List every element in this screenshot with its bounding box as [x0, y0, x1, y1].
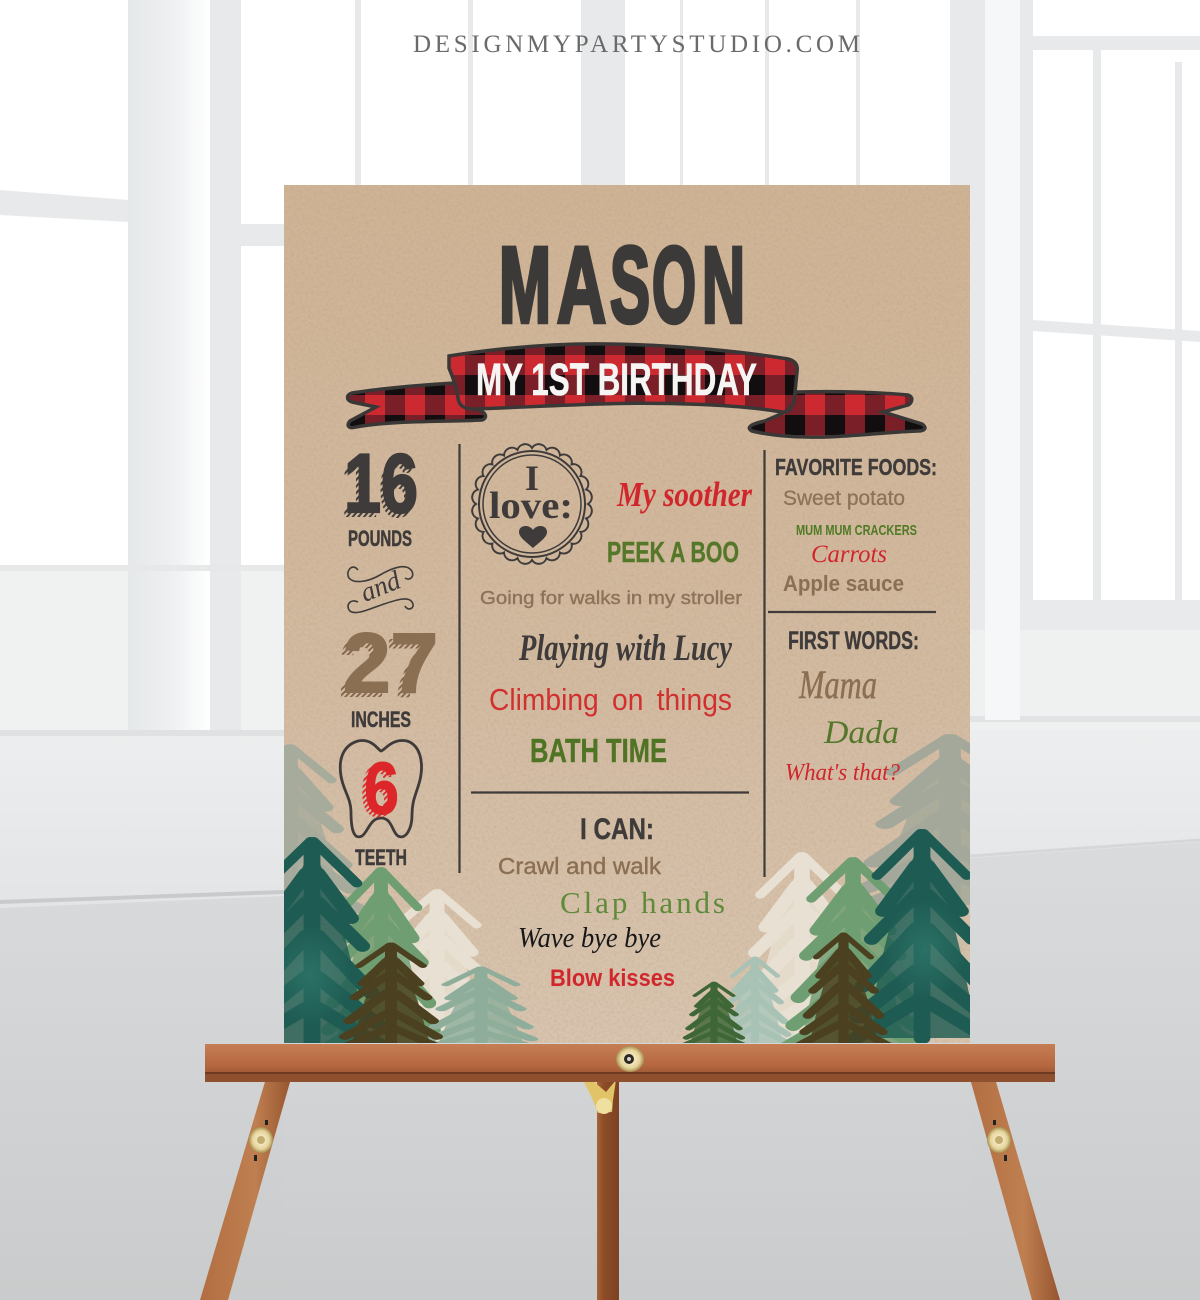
gray tree right	[861, 734, 970, 912]
love item 6: BATH TIME	[530, 732, 667, 769]
ledge top bar	[205, 1044, 1055, 1073]
badge word love: love:	[489, 485, 573, 527]
food item 1: Sweet potato	[783, 487, 905, 510]
I love badge	[472, 444, 592, 564]
can item 4: Blow kisses	[550, 965, 675, 992]
love item 2: PEEK A BOO	[607, 537, 739, 569]
can item 1: Crawl and walk	[498, 853, 662, 879]
easel left leg	[200, 1075, 292, 1300]
easel centre post	[597, 1080, 619, 1300]
title name: S	[610, 224, 650, 345]
white tree left	[403, 889, 492, 1042]
green tree right	[785, 861, 921, 1048]
badge heart	[519, 526, 547, 548]
tooth outline	[340, 741, 421, 837]
sage tree left	[424, 968, 538, 1049]
first words section	[785, 627, 919, 786]
and flourish	[348, 564, 413, 613]
left wing nut	[249, 1120, 273, 1161]
height number: 27	[338, 621, 433, 715]
can item 3: Wave bye bye	[518, 923, 661, 954]
brass clip	[583, 1080, 616, 1114]
love item 3: Going for walks in my stroller	[480, 588, 742, 608]
badge word I: I	[525, 458, 539, 498]
I love list	[480, 475, 752, 769]
ribbon left tail	[348, 383, 485, 428]
weight number: 16	[340, 441, 416, 535]
header: studio name: DESIGNMYPARTYSTUDIO.COM	[413, 31, 860, 58]
ribbon right tail	[749, 392, 925, 437]
ledge knob	[616, 1046, 644, 1072]
word 1: Mama	[798, 662, 877, 707]
word 2: Dada	[823, 715, 899, 751]
title name: O	[652, 224, 696, 345]
food item 4: Apple sauce	[783, 571, 904, 596]
gray tree left	[284, 744, 364, 913]
column dividers	[460, 444, 936, 877]
ledge lip	[205, 1072, 1055, 1082]
I can section	[498, 813, 725, 992]
stats column	[338, 436, 438, 870]
easel right leg	[969, 1075, 1060, 1300]
brown tree right	[799, 935, 888, 1045]
pounds label: POUNDS	[348, 526, 412, 551]
ribbon main band	[449, 344, 797, 412]
easel ledge	[205, 1044, 1055, 1082]
right wing nut	[987, 1120, 1011, 1161]
title name	[499, 224, 745, 345]
I can heading: I CAN:	[580, 813, 654, 846]
pine trees left	[284, 744, 538, 1043]
and flourish: and	[356, 564, 405, 608]
favorite foods section	[775, 454, 937, 596]
love item 5: Climbing on things	[489, 682, 732, 717]
word 3: What's that?	[785, 760, 900, 786]
weight number: 16	[344, 436, 418, 530]
small dark green tree	[683, 983, 745, 1045]
ribbon text: MY 1ST BIRTHDAY	[476, 354, 757, 405]
teeth number: 6	[364, 747, 399, 830]
easel legs	[200, 1075, 1060, 1300]
food item 2: MUM MUM CRACKERS	[796, 522, 917, 539]
love item 4: Playing with Lucy	[518, 628, 732, 669]
teal tree left	[284, 837, 385, 1043]
title name: M	[499, 224, 551, 345]
poster	[284, 185, 970, 1043]
teal tree right	[848, 829, 970, 1043]
white tree right	[740, 852, 842, 1040]
teeth number: 6	[360, 750, 395, 833]
food item 3: Carrots	[811, 541, 887, 568]
words heading: FIRST WORDS:	[788, 627, 919, 655]
height number: 27	[343, 616, 438, 710]
title name: N	[702, 224, 745, 345]
pine trees right	[682, 734, 970, 1043]
love item 1: My soother	[616, 475, 752, 514]
green tree left	[321, 871, 441, 1052]
ribbon banner	[348, 344, 925, 437]
pale blue tree right	[719, 958, 791, 1045]
foods heading: FAVORITE FOODS:	[775, 454, 937, 480]
brown tree left	[339, 945, 443, 1049]
inches label: INCHES	[351, 707, 411, 732]
title name: A	[557, 224, 606, 345]
can item 2: Clap hands	[560, 885, 725, 920]
teeth label: TEETH	[355, 845, 407, 870]
